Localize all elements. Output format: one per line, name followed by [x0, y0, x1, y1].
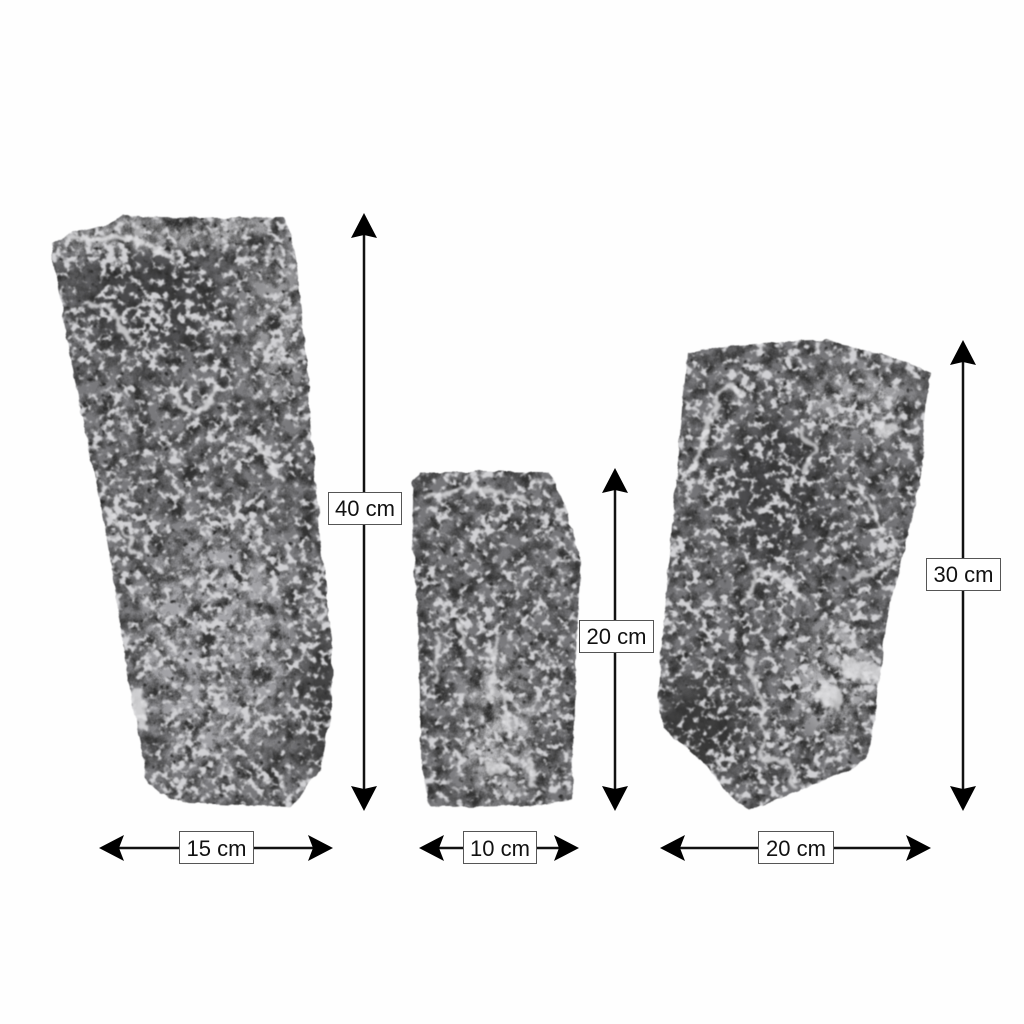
- label: 20 cm height: 20 cm: [587, 624, 646, 649]
- arrow: 20 cm height: [602, 468, 628, 811]
- shading: short block light area: [463, 660, 531, 800]
- label: 20 cm width: [758, 832, 834, 864]
- arrow: 15 cm width: [99, 835, 333, 861]
- veins: [430, 488, 535, 785]
- arrow: 40 cm height: [351, 213, 377, 811]
- veins: [70, 236, 282, 725]
- label: 10 cm: [464, 832, 536, 864]
- label: 20 cm width: 20 cm: [766, 836, 826, 861]
- label: 30 cm: [926, 558, 1000, 590]
- label: 15 cm: [180, 832, 254, 864]
- stone: short block: [405, 465, 590, 815]
- arrow: 20 cm width: [660, 835, 931, 861]
- stone: tall column: [40, 205, 340, 815]
- label: 40 cm: 40 cm: [335, 496, 395, 521]
- label: 30 cm: 30 cm: [934, 562, 993, 587]
- label: 20 cm height: [580, 620, 654, 652]
- label: 40 cm: [328, 492, 402, 524]
- label: 10 cm: 10 cm: [470, 836, 530, 861]
- label: 15 cm: 15 cm: [187, 836, 246, 861]
- veins: [693, 385, 895, 790]
- arrow: 30 cm height: [950, 340, 976, 811]
- stone: wide block: [650, 330, 935, 815]
- shading: wide block zones: [655, 370, 910, 780]
- shading: broad light and dark zones: [60, 218, 338, 780]
- arrow: 10 cm width: [419, 835, 579, 861]
